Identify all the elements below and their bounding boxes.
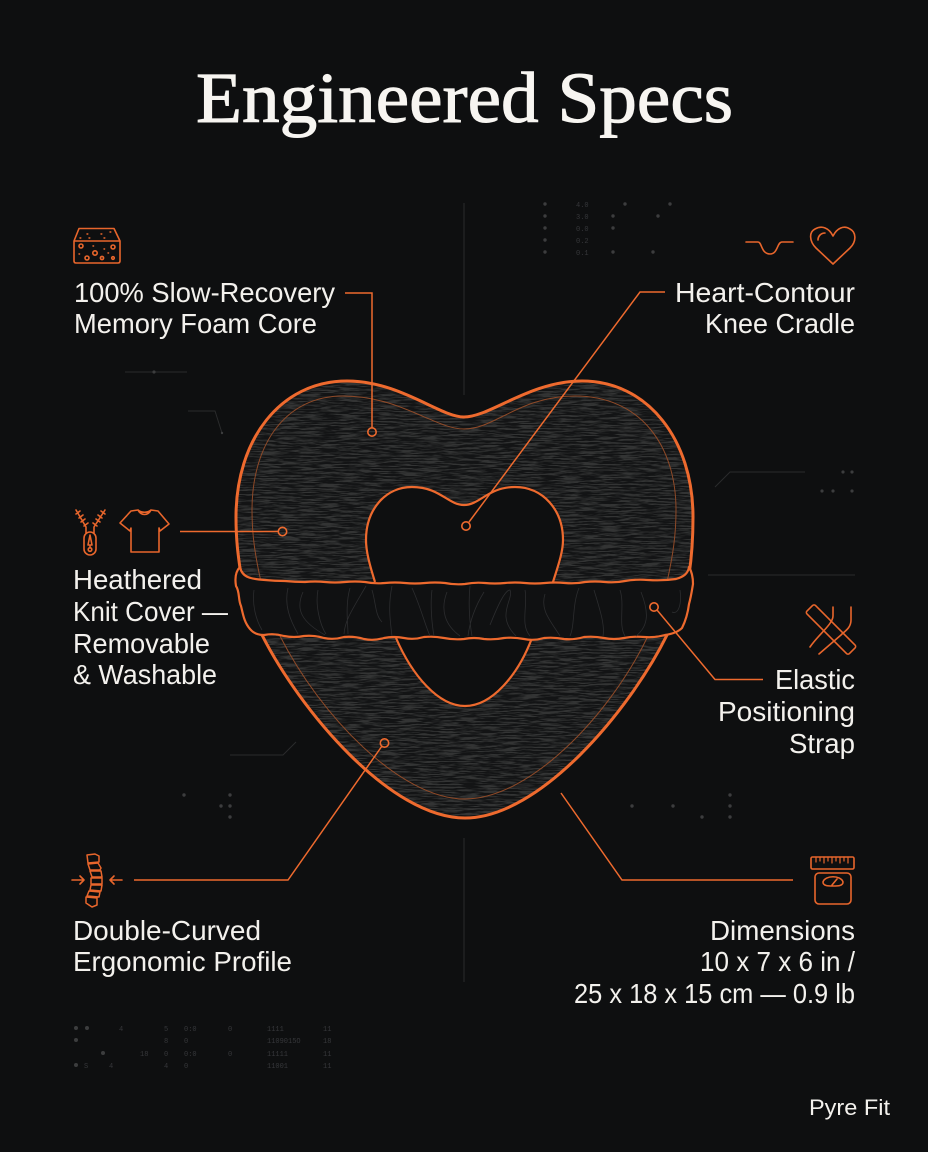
strap wrinkles [253, 586, 681, 636]
outer heart outline [236, 381, 693, 818]
faint data grid: top: 0.0 [576, 226, 589, 234]
faint data grid: top: 3.0 [576, 214, 589, 222]
text: elastic strap [718, 664, 855, 759]
text: ergonomic profile: Double-Curved [73, 915, 261, 946]
icon: zipper [76, 510, 105, 555]
faint data grid: bottom: 1109015O [267, 1038, 301, 1046]
text: ergonomic profile [73, 915, 292, 977]
text: elastic strap: Elastic [775, 664, 855, 695]
inner heart opening outline [366, 487, 563, 706]
icon: contour curve [746, 242, 793, 254]
callout: heart contour leader [462, 292, 665, 530]
icon: spine [72, 854, 122, 907]
faint data grid: bottom: 0 [164, 1051, 168, 1059]
text: dimensions [574, 915, 855, 1009]
text: knit cover: Knit Cover — [73, 596, 228, 627]
faint data grid: top: 4.0 [576, 202, 589, 210]
faint data grid: bottom: 11 [323, 1063, 331, 1071]
text: knit cover: & Washable [73, 659, 217, 690]
text: elastic strap: Positioning [718, 696, 855, 727]
icon: t-shirt [120, 510, 169, 552]
faint data grid: bottom [74, 1026, 331, 1071]
elastic strap [235, 567, 693, 640]
faint data grid: bottom: 0 [228, 1026, 232, 1034]
faint data grid: bottom: 4 [164, 1063, 168, 1071]
faint data grid: top [543, 202, 672, 258]
icon: ruler and scale [811, 857, 854, 904]
callout: ergonomic profile leader [134, 739, 389, 880]
text: memory foam [74, 277, 335, 339]
faint data grid: bottom: 18 [140, 1051, 148, 1059]
faint data grid: bottom: 11 [323, 1026, 331, 1034]
inner seam line [252, 396, 676, 799]
faint data grid: bottom: 11001 [267, 1063, 288, 1071]
faint data grid: bottom: 1111 [267, 1026, 284, 1034]
faint data grid: bottom: S [84, 1063, 88, 1071]
heathered knit texture [230, 375, 700, 825]
faint data grid: bottom: 4 [119, 1026, 123, 1034]
faint data grid: bottom: 0 [184, 1063, 188, 1071]
text: heart contour: Heart-Contour [675, 277, 855, 308]
text: dimensions: 10 x 7 x 6 in / [700, 946, 855, 977]
text: dimensions: Dimensions [710, 915, 855, 946]
faint data grid: bottom: 0 [228, 1051, 232, 1059]
faint data grid: bottom: 0:0 [184, 1051, 197, 1059]
faint data grid: bottom: 0 [184, 1038, 188, 1046]
callout: dimensions leader [561, 793, 793, 880]
faint data grid: top: 0.1 [576, 250, 589, 258]
text: knit cover: Heathered [73, 564, 202, 595]
brand name: Pyre Fit [809, 1095, 890, 1120]
faint data grid: bottom: 8 [164, 1038, 168, 1046]
text: knit cover [73, 564, 228, 690]
text: heart contour [675, 277, 855, 339]
callout: memory foam leader [345, 293, 376, 436]
callout: strap leader [650, 603, 763, 680]
icon: heart [811, 227, 855, 264]
faint data grid: bottom: 4 [109, 1063, 113, 1071]
text: knit cover: Removable [73, 628, 210, 659]
text: memory foam: 100% Slow-Recovery [74, 277, 335, 308]
text: heart contour: Knee Cradle [705, 308, 855, 339]
faint data grid: bottom: 11 [323, 1051, 331, 1059]
faint data grid: bottom: 18 [323, 1038, 331, 1046]
faint data grid: bottom: 0:0 [184, 1026, 197, 1034]
text: dimensions: 25 x 18 x 15 cm — 0.9 lb [574, 978, 855, 1009]
text: elastic strap: Strap [789, 728, 855, 759]
faint technical background marks [125, 203, 855, 982]
icon: memory foam block [74, 228, 120, 263]
faint data grid: top: 0.2 [576, 238, 589, 246]
faint data grid: bottom: 11111 [267, 1051, 288, 1059]
callout: knit cover leader [180, 527, 287, 536]
text: ergonomic profile: Ergonomic Profile [73, 946, 292, 977]
heart pillow illustration [230, 375, 700, 825]
faint data grid: bottom: 5 [164, 1026, 168, 1034]
title: Engineered Specs [196, 58, 733, 138]
text: memory foam: Memory Foam Core [74, 308, 317, 339]
icon: strap [806, 604, 856, 655]
